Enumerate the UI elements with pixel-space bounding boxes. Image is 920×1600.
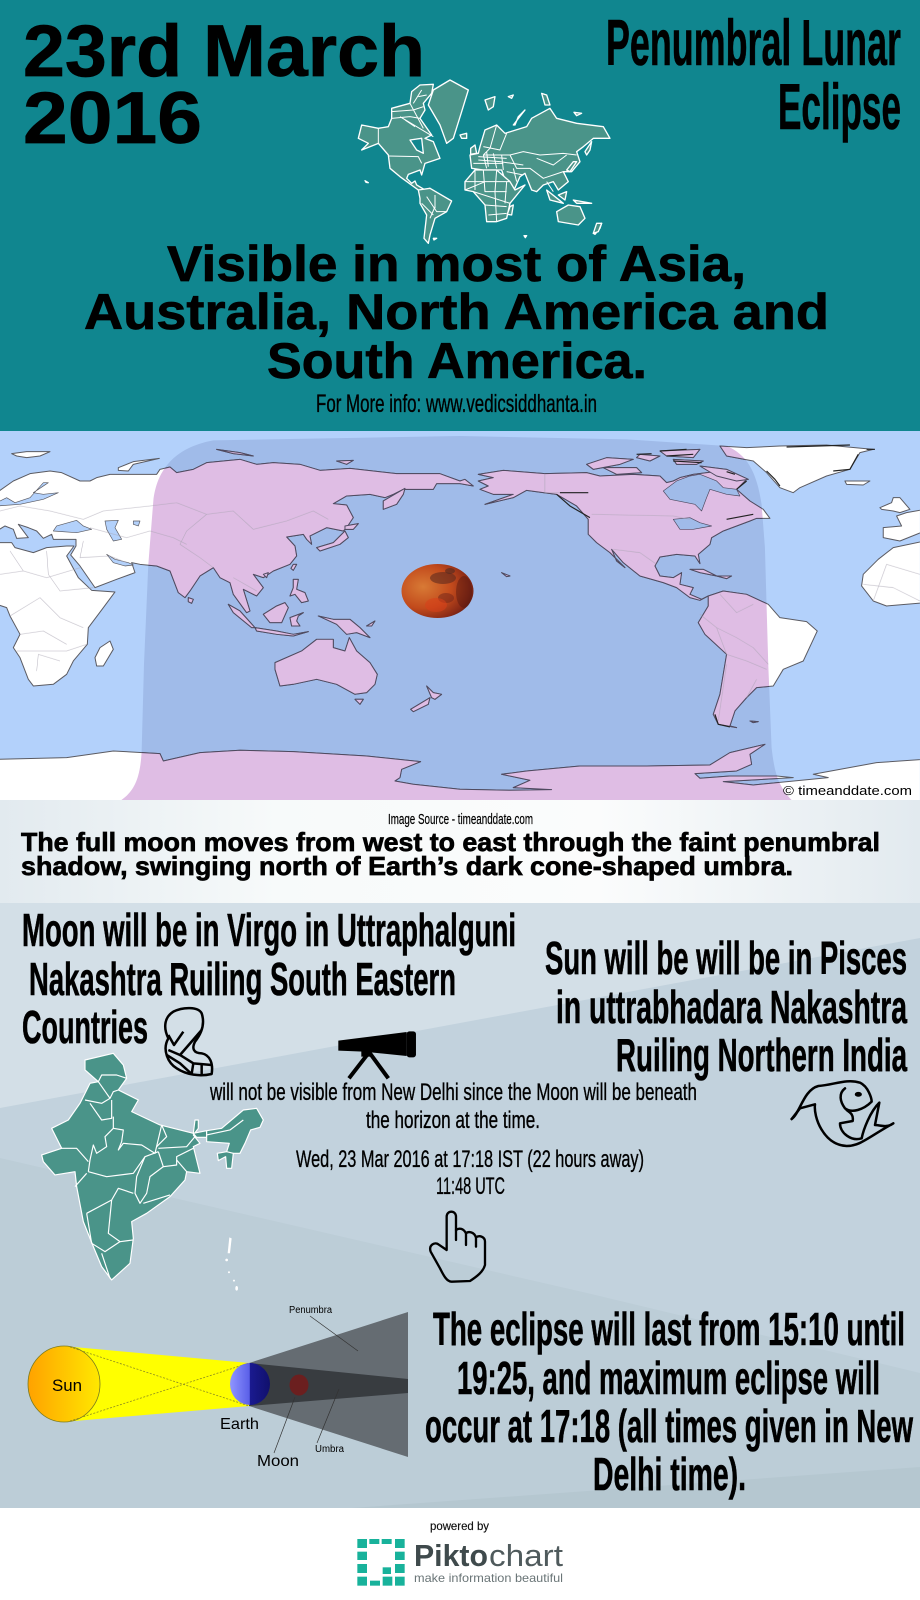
title: eclipse type: [606, 6, 901, 143]
panel: caption band: [0, 800, 920, 903]
title: date: 23rd March: [23, 11, 425, 92]
text: date and time: [296, 1146, 644, 1200]
text: piktochart wordmark: chart: [489, 1538, 563, 1573]
text: moon position: [22, 904, 516, 1053]
icon: pisces: [792, 1081, 893, 1146]
label: umbra: Umbra: [315, 1444, 344, 1455]
icon: telescope: [338, 1031, 416, 1078]
chart: eclipse geometry diagram: [28, 1305, 408, 1470]
icon: virgo: [165, 1008, 212, 1075]
seas: [0, 483, 140, 566]
panel: eclipse visibility map: [0, 431, 920, 808]
panel: header: [0, 0, 920, 431]
text: moon position: Nakashtra Ruiling South Eastern: [29, 953, 456, 1005]
icon: piktochart logo: [357, 1539, 405, 1586]
text: piktochart wordmark: Pikto: [414, 1538, 488, 1573]
text: eclipse timing: Delhi time).: [593, 1448, 746, 1500]
label: sun: Sun: [52, 1376, 82, 1395]
text: eclipse timing: [425, 1303, 913, 1500]
text: sun position: [545, 932, 907, 1081]
heading: visibility: Visible in most of Asia,: [167, 236, 746, 292]
text: new delhi note: will not be visible from New Delhi since the Moon will be beneath: [209, 1079, 697, 1106]
text: moon position: Countries: [22, 1001, 148, 1053]
heading: visibility: [84, 236, 829, 389]
heading: visibility: Australia, North America and: [84, 284, 829, 340]
text: moon path description: [21, 827, 880, 881]
text: tagline: make information beautiful: [414, 1571, 563, 1585]
text: piktochart wordmark: [414, 1538, 563, 1573]
panel: details: [0, 903, 920, 1508]
text: more info link: For More info: www.vedicsiddhanta.in: [316, 390, 597, 418]
panel: footer: [0, 1508, 920, 1600]
dark coast details: [557, 445, 875, 727]
title: date: 2016: [23, 78, 202, 159]
text: moon position: Moon will be in Virgo in Uttraphalguni: [22, 904, 516, 956]
label: moon: Moon: [257, 1453, 299, 1470]
text: new delhi note: [209, 1079, 697, 1134]
label: penumbra: Penumbra: [289, 1305, 332, 1316]
text: moon path description: The full moon moves from west to east through the faint penumbral: [21, 827, 880, 857]
label: earth: Earth: [220, 1416, 259, 1433]
icon: world map: [358, 80, 610, 243]
text: map credit: © timeanddate.com: [783, 784, 912, 798]
text: date and time: 11:48 UTC: [436, 1173, 505, 1200]
text: date and time: Wed, 23 Mar 2016 at 17:18 IST (22 hours away): [296, 1146, 644, 1173]
icon: pointing hand: [430, 1212, 485, 1282]
icon: blood moon: [402, 564, 474, 618]
text: moon path description: shadow, swinging north of Earth’s dark cone-shaped umbra.: [21, 851, 793, 881]
borders: [0, 474, 920, 721]
title: date: [23, 11, 425, 159]
heading: visibility: South America.: [267, 333, 647, 389]
text: new delhi note: the horizon at the time.: [366, 1107, 540, 1134]
text: image source: Image Source - timeanddate.com: [388, 811, 533, 828]
text: powered by: powered by: [430, 1519, 489, 1533]
icon: india map: [42, 1053, 263, 1291]
